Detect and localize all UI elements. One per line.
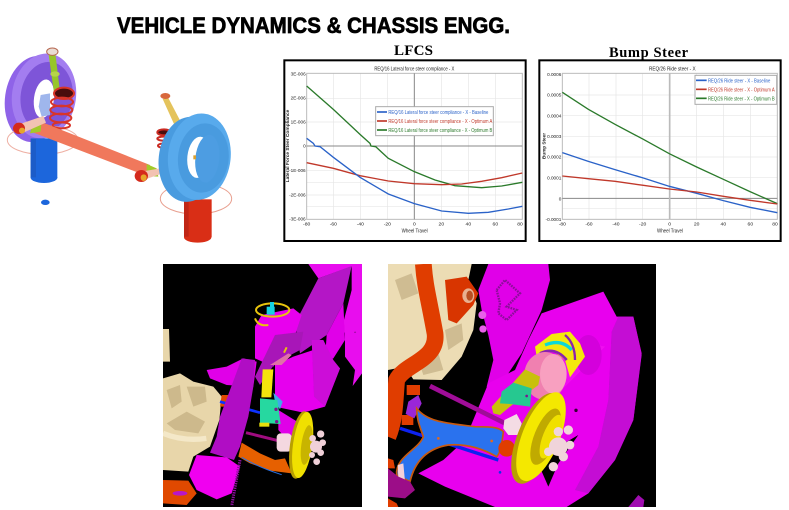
y axis tick labels: -0.0001: [546, 217, 562, 222]
main magenta panel: [418, 292, 642, 507]
x axis tick labels: 40: [466, 221, 471, 227]
y axis tick labels: 2E-006: [291, 96, 306, 101]
x axis title: Wheel Travel: [402, 229, 428, 235]
plot area grid: [307, 73, 522, 219]
y axis tick labels: 0: [559, 196, 562, 201]
left spring red: [50, 88, 74, 128]
y axis title: Lateral Force Steer Compliance: [285, 109, 291, 182]
left blue cylinder: [31, 138, 57, 183]
y axis tick labels: 0.0001: [547, 175, 562, 180]
x axis tick labels: -60: [585, 221, 593, 227]
x axis tick labels: -20: [639, 221, 646, 227]
left ring lower: [7, 126, 78, 154]
left arms: [207, 358, 257, 387]
legend: REQ/16 Lateral force steer compliance - X - Optimum B: [388, 128, 493, 134]
legend: [376, 107, 493, 136]
blue clip: [273, 393, 283, 409]
front blob: [189, 455, 240, 499]
left knuckle: [39, 93, 50, 117]
upper body structure: [295, 264, 362, 386]
right tyre blue: [154, 110, 235, 205]
right strut tan: [160, 93, 181, 124]
pink spring base: [270, 353, 292, 365]
y axis tick labels: 1E-006: [291, 119, 306, 124]
pink coil body: [524, 352, 567, 400]
main curved arm: [210, 358, 255, 460]
central tower: [255, 308, 340, 413]
lower right fragment: [628, 495, 644, 507]
lower bracket magenta: [278, 410, 300, 447]
chart frame: [539, 60, 781, 241]
x axis tick labels: 20: [694, 221, 700, 227]
y axis tick labels: 3E-006: [291, 71, 306, 76]
right red cylinder: [184, 199, 212, 243]
legend: REQ/16 Lateral force steer compliance - X - Optimum A: [388, 119, 493, 125]
x axis tick labels: -40: [357, 221, 364, 227]
yellow brake disc: [285, 410, 317, 480]
yellow brake disc: [501, 386, 576, 490]
panel: rear suspension render left: [163, 264, 362, 507]
magenta link: [246, 433, 278, 441]
chart: Bump Steer: [539, 60, 781, 241]
y axis tick labels: -1E-006: [289, 168, 306, 173]
y axis tick labels: 0.0003: [547, 134, 562, 139]
y axis tick labels: 0.0004: [547, 113, 562, 118]
chart title: REQ/26 Ride steer - X: [649, 66, 696, 72]
y axis title: Bump Steer: [541, 133, 547, 159]
series: Optimum B: [562, 92, 777, 204]
teal bracket: [259, 398, 281, 427]
blue link: [220, 402, 260, 413]
right ring: [160, 183, 232, 214]
blue link bar: [400, 428, 498, 460]
left tyre purple: [0, 49, 82, 146]
white hub bolts: [309, 430, 326, 465]
yellow spring coils: [535, 332, 585, 377]
legend: [695, 75, 777, 104]
dark magenta base lower left: [388, 468, 415, 498]
x axis tick labels: -60: [330, 221, 337, 227]
x axis tick labels: 20: [439, 221, 444, 227]
engine tan: [388, 264, 477, 380]
y axis tick labels: -2E-006: [289, 192, 306, 197]
trailing beam: [33, 122, 150, 176]
right beam end: [135, 164, 161, 182]
upper magenta mount: [478, 264, 550, 393]
damper yellow-olive: [492, 369, 540, 415]
y axis tick labels: -3E-006: [289, 217, 306, 222]
chart: LFCS: [284, 60, 526, 241]
purple wedge: [255, 332, 303, 385]
x axis tick labels: [303, 221, 523, 227]
bearing pink: [277, 433, 292, 452]
y axis tick labels: [546, 72, 562, 222]
x axis tick labels: [559, 221, 778, 227]
chart title: REQ/16 Lateral force steer compliance - X: [374, 66, 454, 72]
legend: REQ/26 Ride steer - X - Baseline: [708, 78, 770, 84]
plot area grid: [562, 73, 777, 219]
x axis tick labels: 0: [413, 221, 416, 227]
x axis tick labels: 60: [493, 221, 498, 227]
y axis tick labels: [289, 71, 306, 222]
engine: [163, 373, 222, 472]
orange bits near engine: [163, 395, 228, 505]
suspension model illustration: [0, 48, 235, 243]
left strut green: [47, 48, 60, 93]
left beam end: [13, 116, 46, 134]
x axis title: Wheel Travel: [657, 229, 683, 235]
x axis tick labels: -40: [612, 221, 620, 227]
orange lower bits: [388, 458, 395, 468]
series: Baseline: [307, 138, 522, 213]
white bearing: [503, 414, 522, 435]
orange lower arm: [238, 443, 292, 473]
small blue dot: [41, 200, 50, 205]
x axis tick labels: -80: [303, 221, 310, 227]
title: VEHICLE DYNAMICS & CHASSIS ENGG.: [117, 13, 510, 38]
purple tie rod: [430, 386, 505, 423]
yellow strut: [261, 369, 273, 397]
series: Optimum B: [307, 86, 522, 188]
x axis tick labels: -80: [559, 221, 566, 227]
right spring red: [157, 129, 171, 148]
green bracket: [500, 383, 532, 407]
small blue dot: [499, 471, 501, 474]
y axis tick labels: 0.0005: [547, 93, 562, 98]
heading LFCS: LFCS: [394, 43, 433, 59]
x axis tick labels: 80: [517, 221, 523, 227]
y axis tick labels: 0.0006: [547, 72, 562, 77]
yellow spring top: [255, 303, 289, 353]
tan top fragment: [163, 329, 170, 362]
white hub bolts: [544, 425, 574, 471]
x axis tick labels: 60: [748, 221, 753, 227]
purple detail bottom left: [173, 491, 187, 496]
black gap: [537, 435, 578, 487]
series: Optimum A: [562, 176, 777, 204]
panel: front suspension render right: [388, 264, 656, 507]
violet bushing: [406, 395, 422, 418]
series: Optimum A: [307, 163, 522, 185]
orange ball joint: [498, 440, 515, 457]
series: Baseline: [562, 153, 777, 213]
blue control arm: [397, 408, 503, 482]
x axis tick labels: 40: [721, 221, 726, 227]
x axis tick labels: 80: [772, 221, 778, 227]
orange subframe: [388, 264, 478, 437]
x axis tick labels: 0: [668, 221, 671, 227]
heading Bump Steer: Bump Steer: [609, 45, 689, 61]
y axis tick labels: 0: [303, 144, 306, 149]
chart frame: [284, 60, 526, 241]
x axis tick labels: -20: [384, 221, 391, 227]
legend: REQ/16 Lateral force steer compliance - X - Baseline: [388, 110, 488, 116]
y axis tick labels: 0.0002: [547, 155, 562, 160]
cyan top mount: [267, 302, 275, 315]
